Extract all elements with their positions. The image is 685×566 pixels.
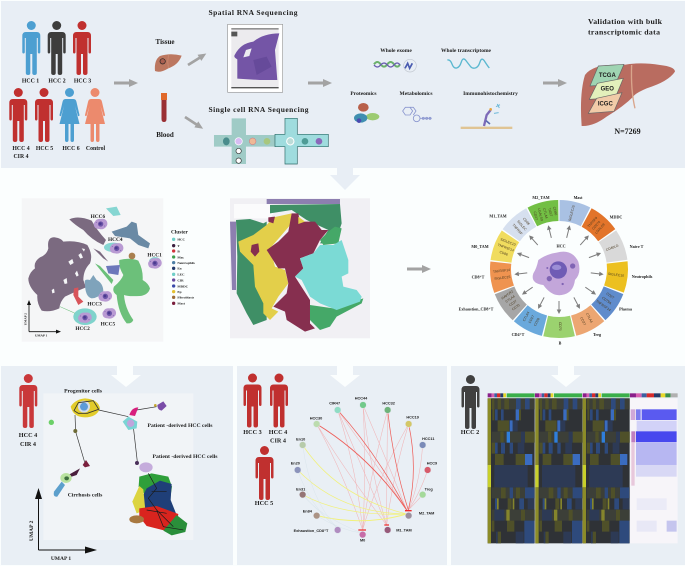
wheel labels: Naive T: [630, 244, 644, 249]
network node labels: CIR47: [329, 401, 340, 405]
cluster legend: Fibroblasts: [177, 296, 195, 300]
multi-omics assays: [354, 59, 512, 129]
cluster legend: Cluster: [171, 230, 188, 236]
gene names in ring: CD86: [552, 206, 558, 216]
icon: HCC 2 patient: [462, 375, 480, 429]
patient label: CIR 4: [20, 441, 36, 448]
patient labels: HCC 3: [243, 429, 262, 436]
expression plot: [630, 398, 678, 543]
arrow: multi-omics to validation: [543, 79, 567, 87]
liver validation datasets: ICGC: [598, 101, 613, 107]
wheel labels: CD8⁺T: [472, 274, 485, 280]
icon: liver tissue: [155, 54, 182, 72]
cluster legend: Mac: [177, 255, 184, 259]
patient labels: HCC 5: [255, 500, 273, 507]
gene names in ring: CD27: [508, 299, 518, 307]
patient labels: HCC 1: [22, 78, 39, 84]
network node labels: Treg: [425, 488, 433, 492]
network nodes: [294, 402, 431, 538]
panel: cell communication network: [237, 360, 447, 565]
icon: HCC 5 patient: [256, 446, 274, 500]
cell population labels: Cirrhosis cells: [68, 492, 103, 498]
icon: HCC 5 patient: [35, 88, 53, 142]
heading: validation: [588, 17, 663, 36]
gene names in ring: CD27: [605, 292, 615, 300]
HCC labels: HCC1: [147, 253, 162, 259]
gene names in ring: TNFRSF14: [497, 243, 515, 253]
trajectory UMAP: [43, 393, 193, 540]
wheel labels: M1_TAM: [489, 214, 507, 218]
heading: validation: Validation with bulk: [588, 17, 663, 26]
heading: validation: transcriptomic data: [588, 28, 660, 36]
cluster legend: MDDC: [177, 284, 189, 288]
gene names in ring: SIGLEC10: [608, 272, 624, 278]
network node labels: M1_TAM: [396, 528, 412, 532]
gene names in ring: CD40LG: [605, 243, 619, 252]
wheel labels: M0_TAM: [471, 244, 489, 249]
HCC labels: HCC2: [75, 326, 90, 332]
H&E spatial slide: [228, 24, 283, 92]
heading: tissue: Tissue: [156, 38, 174, 46]
icon: HCC 3 patient: [244, 374, 262, 428]
liver validation datasets: [581, 63, 675, 126]
wheel labels: MDDC: [610, 214, 622, 220]
icon: HCC cell markers: [78, 219, 162, 323]
UMAP of all cells: [22, 198, 196, 342]
gene names in ring: CTLA4: [505, 294, 516, 304]
spatial cluster map: [230, 198, 370, 338]
HCC labels: HCC5: [101, 321, 115, 327]
patient cohort: [9, 21, 105, 160]
assay labels: Whole exome: [380, 48, 412, 54]
network chart: [291, 396, 437, 543]
icon: HCC 4 CIR 4 patient: [19, 374, 37, 428]
gene names in ring: TNFRSF14: [595, 299, 612, 312]
cluster legend: B: [177, 249, 180, 253]
wheel labels: Plasma: [619, 306, 632, 312]
patient labels: Control: [86, 146, 105, 152]
ring segments: [476, 186, 642, 352]
arrow: tissue to spatial: [186, 51, 208, 68]
network node labels: HCC30: [310, 416, 322, 420]
cluster legend: En: [177, 267, 182, 271]
axes: UMAP 2: [24, 313, 28, 325]
wheel labels: HCC: [556, 244, 566, 248]
network node labels: M0: [360, 539, 365, 543]
icon: HCC 4 CIR 4 patient: [9, 88, 27, 142]
axes: UMAP 1: [35, 334, 48, 338]
patient label: [19, 432, 37, 448]
UMAP axes: UMAP 1: [51, 556, 71, 562]
cluster legend: [171, 230, 196, 306]
patient labels: HCC 4: [12, 146, 30, 152]
UMAP axes: UMAP 2: [29, 520, 35, 541]
network node labels: En84: [303, 510, 313, 514]
icon: blood tube: [161, 93, 167, 122]
gene names in ring: SIGLEC15: [568, 205, 576, 221]
cluster legend: HCC: [177, 238, 186, 242]
cluster legend: T: [177, 244, 180, 248]
gene names in ring: CD86: [499, 250, 509, 257]
axes: [24, 300, 61, 338]
arrow: into trajectory panel: [111, 360, 141, 387]
arrow: spatial map to ligand wheel: [407, 265, 431, 273]
cell population labels: Patient -derived HCC cells: [148, 423, 213, 429]
gene names in ring: TNFSF9: [587, 216, 598, 228]
network node labels: HCC9: [427, 462, 437, 466]
gene names in ring: SIGLEC15: [494, 275, 511, 281]
icon: control patient: [85, 88, 105, 142]
icon: central HCC cell: [533, 252, 579, 295]
patient labels: HCC 2: [48, 78, 66, 84]
network node labels: En20: [291, 462, 300, 466]
heading: blood: Blood: [156, 131, 174, 139]
UMAP axes: [29, 488, 97, 562]
arrow: blood to single cell: [183, 114, 205, 132]
gene names in ring: CD274: [591, 220, 601, 231]
arrow: sequencing to multi-omics: [308, 79, 332, 87]
microfluidic chip diagram: [214, 118, 328, 164]
heading: spatial RNA sequencing: Spatial RNA Sequencing: [208, 8, 298, 17]
gene names in ring: SIGLEC10: [500, 237, 516, 247]
patient label: HCC 2: [461, 429, 479, 436]
cell population labels: Progenitor cells: [64, 388, 103, 394]
arrow: into network panel: [330, 360, 360, 387]
wheel labels: B: [559, 340, 562, 346]
network node labels: HCC32: [382, 401, 395, 405]
cell population labels: Patient -derived HCC cells: [153, 454, 218, 460]
liver validation datasets: TCGA: [599, 73, 616, 79]
icon: whole transcriptome RNA: [447, 59, 489, 68]
network node labels: Exhaustion_CD8⁺T: [294, 529, 329, 533]
heatmap charts: [488, 393, 678, 543]
heatmap: block 1: [488, 398, 535, 543]
heatmap: block 3: [583, 398, 630, 543]
gene names in ring: TNFRSF14: [493, 268, 510, 274]
icon: protein structure: [354, 103, 379, 123]
cluster legend: Neutrophils: [177, 261, 196, 265]
gene names in ring: HAVCR2: [501, 289, 514, 300]
network node labels: En31: [296, 487, 306, 491]
gene names in ring: CD27: [528, 314, 535, 324]
arrow: patients to samples: [114, 79, 138, 87]
HCC labels: HCC3: [87, 302, 102, 308]
patient labels: HCC 4: [269, 429, 287, 436]
wheel labels: CD4⁺T: [512, 332, 525, 337]
HCC labels: [75, 214, 162, 332]
sample count: N=7269: [614, 127, 641, 136]
gene names in ring: CD70: [511, 303, 521, 311]
icon: immunohistochemistry antibody: [461, 104, 512, 129]
arrow: into heatmap panel: [551, 360, 581, 387]
network node labels: HCC19: [406, 415, 419, 419]
gene names in ring: CTLA4: [585, 312, 593, 324]
icon: HCC 6 patient: [60, 88, 80, 142]
gene names in ring: CD27: [533, 211, 539, 221]
gene names in ring: CTLA4: [542, 208, 549, 219]
gene names in ring: CD79A: [601, 296, 613, 306]
panel: study design background: [1, 1, 685, 168]
wheel labels: Neutrophils: [632, 274, 653, 279]
heading: single cell RNA sequencing: Single cell RNA Sequencing: [208, 105, 309, 114]
patient labels: HCC 5: [36, 146, 53, 152]
HCC labels: HCC4: [108, 237, 123, 243]
patient labels: [243, 429, 287, 507]
gene names in ring: [493, 205, 624, 331]
annotation bars: [488, 393, 678, 397]
wheel labels: Treg: [593, 332, 601, 337]
liver validation datasets: GEO: [601, 87, 614, 93]
wheel labels: M2_TAM: [532, 195, 550, 200]
icon: HCC 1 patient: [22, 21, 40, 75]
network node labels: En10: [296, 437, 305, 441]
network node labels: M2_TAM: [419, 511, 434, 515]
wheel labels: [459, 195, 653, 346]
gene names in ring: LGALS9: [594, 223, 606, 235]
assay labels: Metabolomics: [400, 91, 432, 97]
radial arrows: [514, 225, 604, 314]
cluster legend: Mast: [177, 302, 186, 306]
cluster legend: LEC: [177, 273, 185, 277]
assay labels: Immunohistochemistry: [463, 91, 518, 97]
assay labels: [350, 48, 518, 97]
wheel labels: Exhaustion_CD8⁺T: [459, 306, 494, 312]
patient labels: CIR 4: [14, 154, 29, 160]
panel: trajectory analysis: [1, 360, 233, 565]
patient labels: [12, 78, 105, 160]
gene names in ring: TNFRSF: [511, 223, 523, 236]
gene names in ring: CD86: [522, 217, 531, 226]
wheel labels: Mast: [574, 195, 583, 200]
icon: whole exome DNA: [374, 59, 416, 72]
immune checkpoint wheel: [459, 186, 653, 352]
arrow: top panel to middle section: [330, 168, 360, 190]
patient labels: HCC 3: [74, 78, 91, 84]
gene names in ring: LGALS9: [537, 208, 544, 221]
icon: metabolite structure: [403, 107, 432, 122]
icon: HCC 2 patient: [48, 21, 66, 75]
icon: HCC 3 patient: [73, 21, 91, 75]
patient label: HCC 4: [19, 432, 37, 439]
network node labels: HCC11: [422, 437, 435, 441]
gene names in ring: CD70: [558, 322, 562, 331]
heatmap: block 2: [535, 398, 582, 543]
panel: heatmaps: [451, 360, 685, 565]
cell population labels: [64, 388, 218, 498]
gene names in ring: CD28: [533, 317, 541, 327]
cluster legend: CIR: [177, 278, 184, 282]
assay labels: Proteomics: [350, 91, 377, 97]
gene names in ring: SIGLEC: [516, 219, 528, 232]
cluster legend: Ep: [177, 290, 182, 294]
HCC labels: HCC6: [91, 214, 105, 220]
gene names in ring: CD27: [579, 316, 587, 326]
icon: HCC 4 CIR 4 patient: [270, 374, 288, 428]
gene names in ring: TIGIT: [547, 207, 553, 217]
patient labels: HCC 6: [62, 146, 80, 152]
network node labels: [291, 396, 437, 543]
patient labels: CIR 4: [270, 438, 286, 444]
network node labels: HCC44: [355, 396, 368, 400]
assay labels: Whole transcriptome: [441, 48, 492, 54]
gene names in ring: CTLA4: [522, 311, 530, 322]
